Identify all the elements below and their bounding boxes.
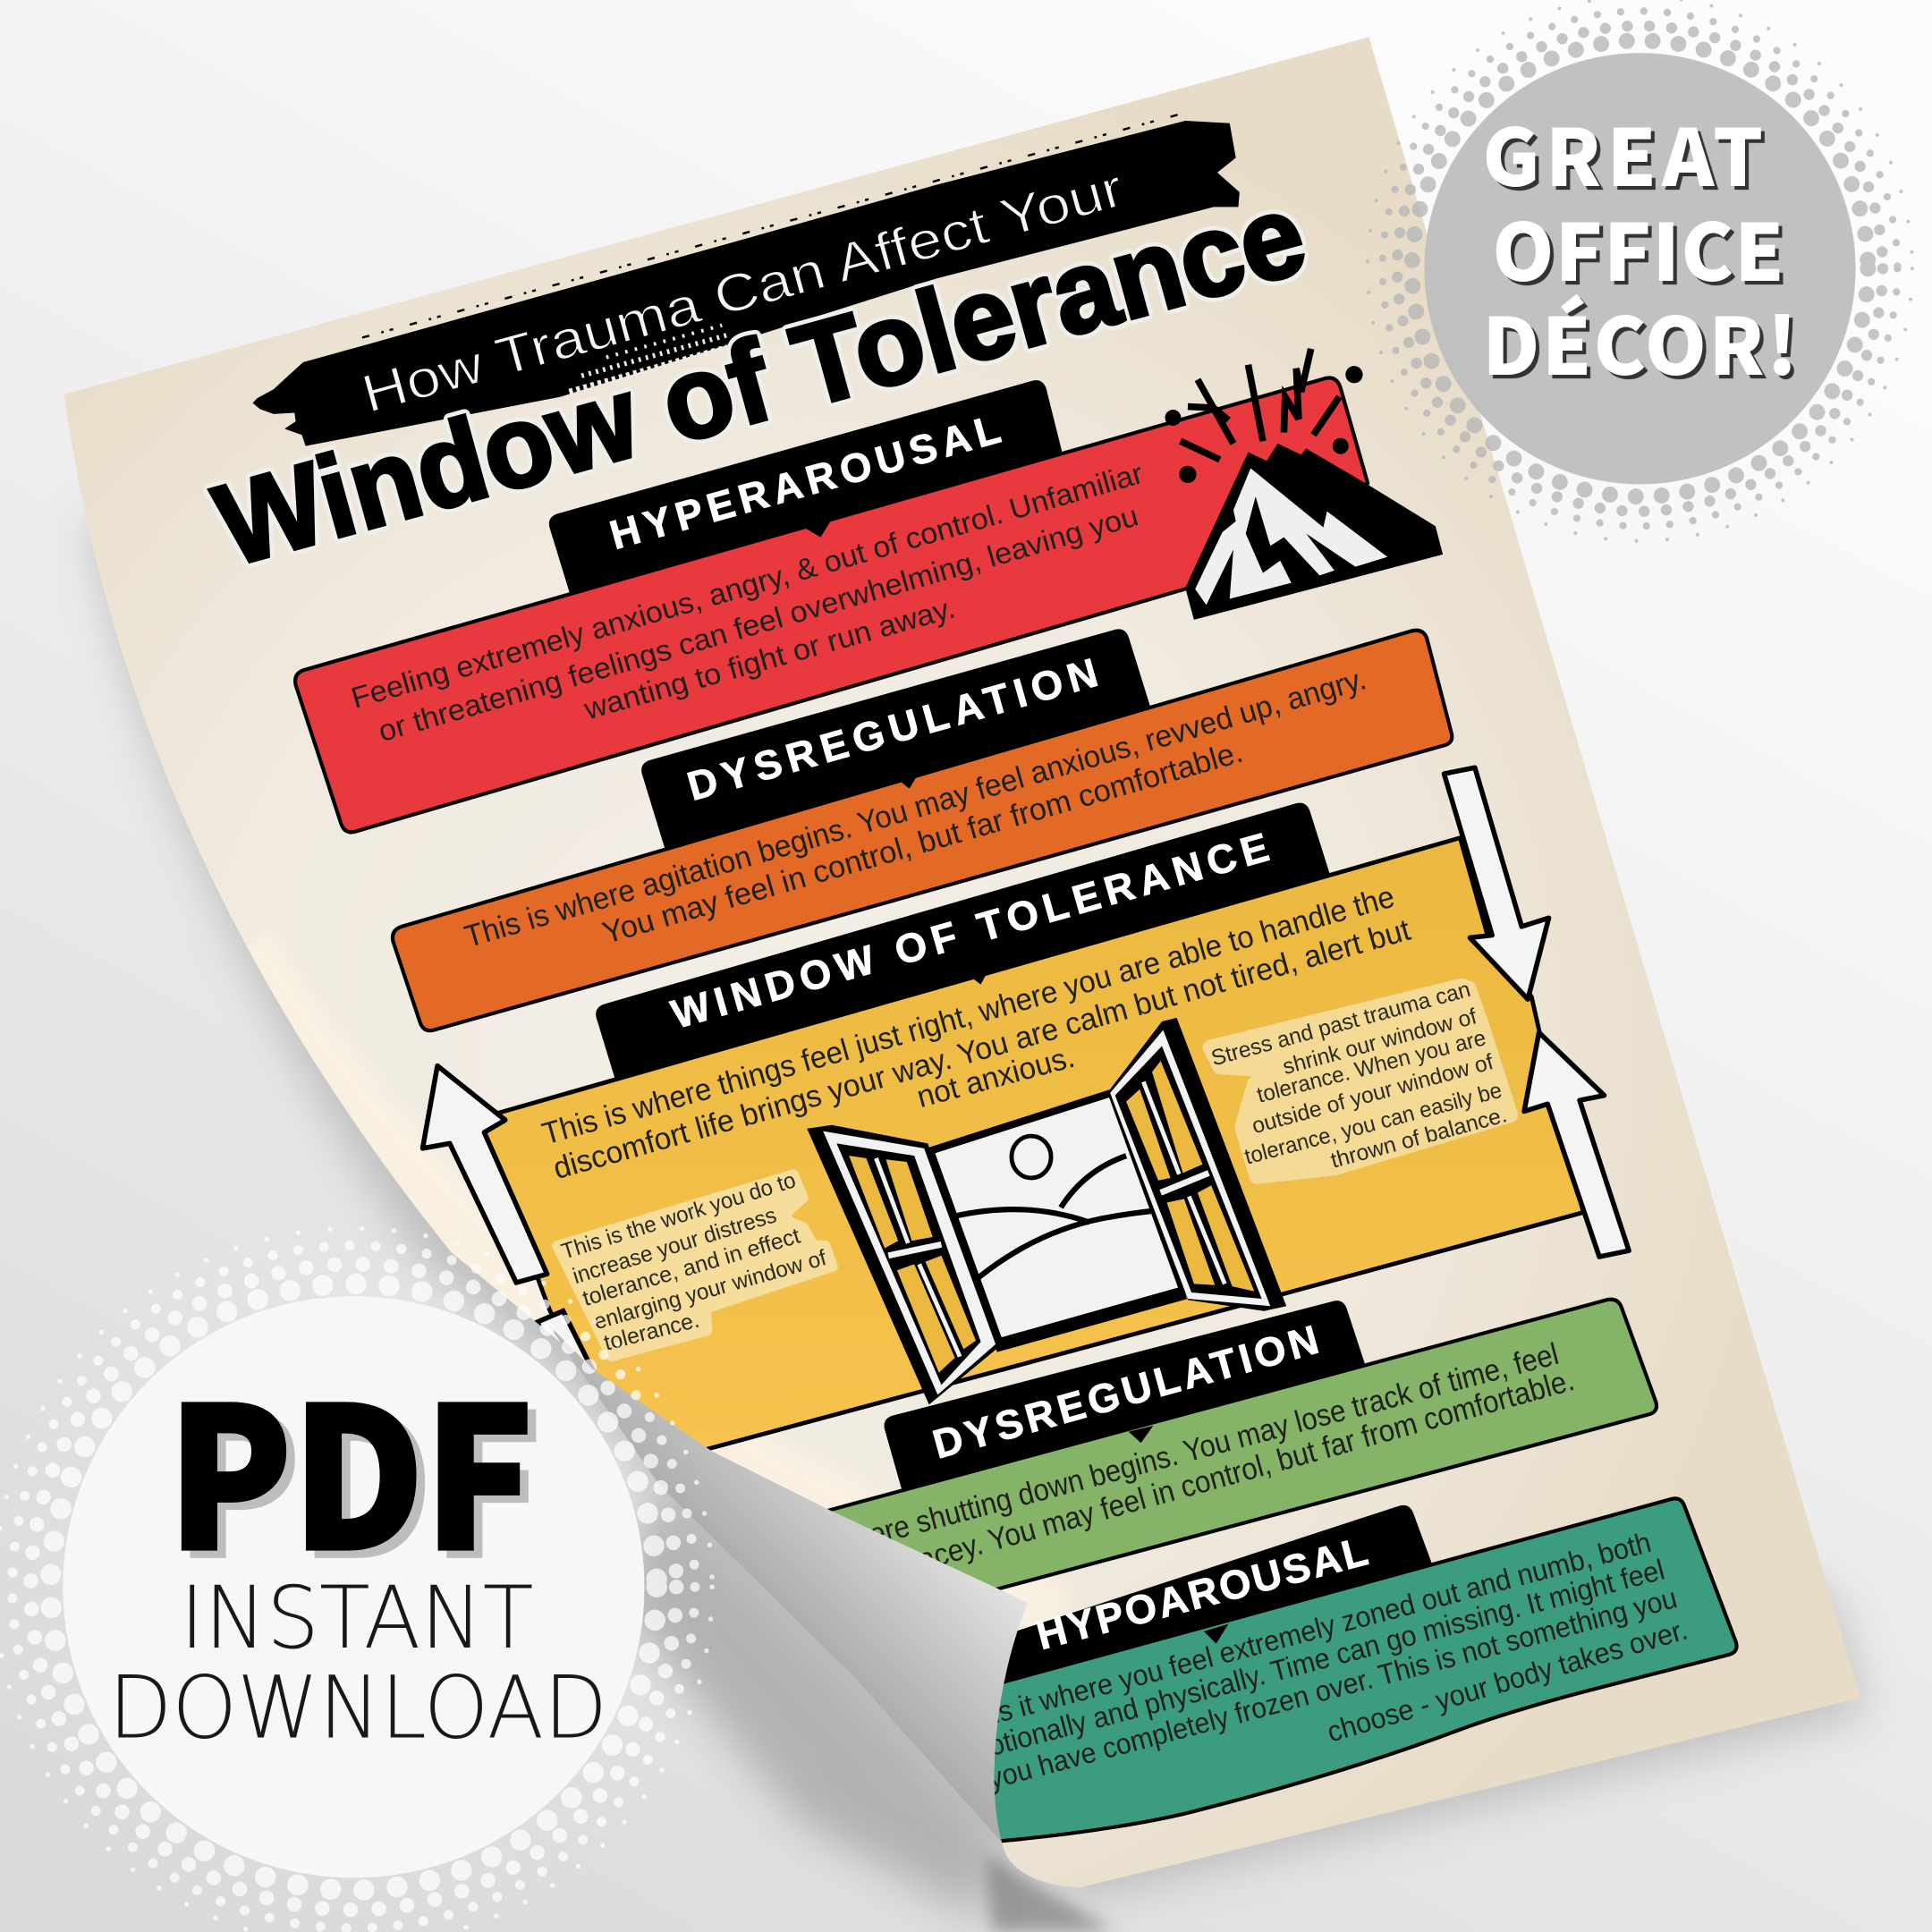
body text: This is where things feel just right, where you are able to handle the: [538, 880, 1398, 1151]
panel: window of tolerance: [478, 803, 1583, 1469]
callout: enlarge window: This is the work you do to: [559, 1168, 799, 1265]
halftone dots: [0, 1228, 712, 1932]
badge: great office decor: [1368, 0, 1912, 541]
tab pointer: [1129, 1426, 1153, 1443]
tab: window of tolerance: [596, 803, 1334, 1090]
callout: enlarge window: tolerance.: [602, 1309, 702, 1356]
circle: [63, 1296, 644, 1877]
right shutter: [1110, 1018, 1286, 1311]
window view: [930, 1093, 1182, 1342]
callout: shrink window: tolerance. When you are: [1255, 1026, 1488, 1108]
left shutter: [807, 1125, 999, 1404]
sun: [1012, 1136, 1051, 1178]
callout: enlarge window: tolerance, and in effect: [580, 1224, 803, 1311]
body text: wanting to fight or run away.: [580, 591, 959, 726]
icon: erupting mountain: [1165, 349, 1443, 620]
panel: dysregulation lower: [746, 1300, 1657, 1651]
tab: hyperarousal: [549, 380, 1064, 604]
page curl flap: [548, 1325, 1028, 1842]
body text: like you have completely frozen over. This is not something you: [938, 1581, 1681, 1808]
paper warm glow: [249, 945, 1063, 1630]
callout: enlarge window: enlarging your window of: [591, 1246, 829, 1335]
badge text: OFFICE: [1492, 191, 1784, 304]
yellow box: [478, 838, 1583, 1469]
tab label: DYSREGULATION: [928, 1317, 1324, 1468]
halftone dots: [1368, 0, 1912, 541]
body text: discomfort life brings your way. You are calm but not tired, alert but: [550, 913, 1414, 1186]
title brush stroke: [252, 114, 1240, 446]
callout: shrink window: thrown of balance.: [1328, 1103, 1510, 1174]
circle: [1424, 53, 1856, 484]
arrow: shrink up right: [1524, 1032, 1629, 1257]
tab pointer: [897, 773, 919, 789]
paper shadow: [86, 518, 1867, 1932]
download text: DOWNLOAD: [108, 1657, 607, 1758]
callout: shrink window: [1208, 978, 1511, 1177]
red box: [295, 377, 1368, 832]
green box: [764, 1300, 1657, 1651]
callout: enlarge window: increase your distress: [570, 1203, 779, 1289]
panel: hypoarousal: [931, 1498, 1737, 1848]
body text: not anxious.: [913, 1040, 1078, 1114]
body text: Feeling extremely anxious, angry, & out of control. Unfamiliar: [348, 457, 1147, 716]
pdf text shadow: PDF: [176, 1331, 542, 1613]
title line 2: Window of Tolerance: [203, 169, 1318, 591]
panel: hyperarousal: [295, 377, 1368, 832]
illustration: open window: [807, 1018, 1286, 1404]
body text: This is it where you feel extremely zoned out and numb, both: [931, 1526, 1655, 1744]
callout: shrink window: shrink our window of: [1280, 1004, 1479, 1080]
body text: You may feel in control, but far from comfortable.: [598, 735, 1247, 951]
body text: This is where shutting down begins. You may lose track of time, feel: [746, 1337, 1563, 1584]
badge: pdf instant download: [0, 1228, 712, 1932]
body text: choose - your body takes over.: [1324, 1614, 1691, 1749]
panel: dysregulation upper: [393, 629, 1452, 1030]
arrow: shrink down right: [1444, 767, 1549, 999]
tab pointer: [966, 966, 991, 985]
teal box: [936, 1498, 1737, 1848]
tab label: DYSREGULATION: [682, 649, 1103, 809]
tab pointer: [806, 521, 830, 538]
title line 2 outline: Window of Tolerance: [203, 169, 1318, 591]
hills: [955, 1156, 1151, 1278]
orange box: [393, 631, 1452, 1030]
tab label: HYPERAROUSAL: [605, 406, 1005, 558]
tab: dysregulation: [641, 629, 1151, 851]
callout: shrink window: tolerance, you can easily be: [1242, 1079, 1504, 1170]
badge text: GREAT: [1482, 96, 1763, 209]
tab: hypoarousal: [936, 1505, 1439, 1719]
callout: shrink window: outside of your window of: [1250, 1050, 1496, 1139]
body text: or threatening feelings can feel overwhelming, leaving you: [375, 499, 1142, 749]
body text: emotionally and physically. Time can go missing. It might feel: [948, 1553, 1668, 1772]
pdf text: PDF: [167, 1324, 533, 1606]
tab: dysregulation lower: [885, 1301, 1370, 1504]
callout: enlarge window: [557, 1168, 833, 1357]
badge text: DÉCOR!: [1482, 284, 1798, 398]
poster content: [203, 114, 1737, 1848]
arrow: expand up left: [422, 1066, 594, 1387]
instant text: INSTANT: [180, 1568, 533, 1668]
callout: shrink window: Stress and past trauma can: [1208, 978, 1473, 1071]
body text: spacey. You may feel in control, but far from comfortable.: [886, 1363, 1578, 1585]
tab label: HYPOAROUSAL: [1032, 1528, 1372, 1658]
body text: This is where agitation begins. You may feel anxious, revved up, angry.: [461, 662, 1370, 954]
tab label: WINDOW OF TOLERANCE: [666, 824, 1274, 1038]
badge text: [1482, 96, 1798, 398]
tab pointer: [1204, 1624, 1228, 1644]
title line 1: How Trauma Can Affect Your: [356, 157, 1130, 424]
